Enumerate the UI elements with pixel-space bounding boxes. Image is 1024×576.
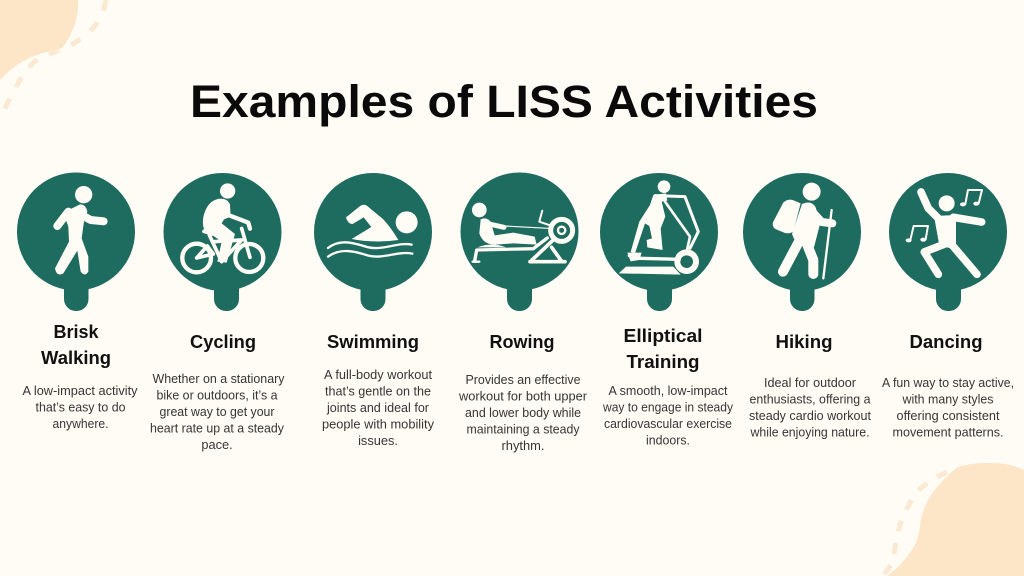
heading: rowing: Rowing	[490, 331, 554, 352]
text: dancing description: movement patterns.	[892, 424, 1004, 440]
heading: brisk walking: Brisk	[54, 321, 99, 342]
text: hiking description	[749, 375, 871, 440]
text: elliptical description	[602, 383, 734, 448]
heading: swimming: Swimming	[327, 331, 419, 352]
text: cycling description	[150, 371, 285, 452]
marker: rowing	[460, 172, 578, 311]
text: cycling description: Whether on a stationary	[152, 371, 285, 386]
text: hiking description: Ideal for outdoor	[764, 375, 857, 390]
marker: dancing	[889, 173, 1007, 311]
text: cycling description: heart rate up at a steady	[150, 420, 285, 436]
decorative blob: bottom right	[882, 463, 1024, 576]
heading: cycling: Cycling	[190, 331, 256, 352]
text: rowing description: workout for both upper	[458, 388, 588, 404]
text: elliptical description: cardiovascular exercise	[604, 416, 732, 431]
marker: swimming	[314, 173, 432, 311]
text: rowing description: rhythm.	[502, 438, 544, 453]
panel: swimming	[314, 173, 435, 448]
text: cycling description: great way to get your	[160, 404, 275, 419]
text: rowing description: Provides an effective	[466, 372, 580, 387]
panel: hiking	[743, 173, 871, 440]
text: hiking description: while enjoying nature.	[750, 424, 870, 440]
icon: elliptical machine	[619, 180, 698, 275]
text: swimming description: A full-body workout	[324, 367, 432, 382]
heading: elliptical training: Training	[626, 351, 700, 372]
text: brisk walking description: A low-impact activity	[22, 383, 138, 398]
marker: elliptical	[600, 173, 718, 311]
decorative blob: top left	[0, 0, 106, 118]
panel: elliptical training	[600, 173, 734, 448]
text: elliptical description: indoors.	[646, 432, 690, 448]
text: dancing description	[882, 375, 1014, 440]
panel: brisk walking	[17, 172, 138, 431]
text: swimming description	[322, 367, 435, 448]
text: swimming description: that’s gentle on the	[325, 384, 431, 398]
text: brisk walking description	[22, 383, 138, 431]
heading: elliptical training: Elliptical	[624, 325, 702, 346]
text: rowing description	[458, 372, 588, 453]
panel: cycling	[150, 173, 285, 452]
icon: cyclist	[182, 183, 263, 272]
icon: swimmer	[328, 205, 418, 257]
text: dancing description: with many styles	[902, 392, 994, 406]
text: cycling description: pace.	[201, 437, 233, 452]
panel: rowing	[458, 172, 588, 453]
marker: brisk walking	[17, 172, 135, 311]
text: swimming description: issues.	[358, 433, 398, 448]
text: cycling description: bike or outdoors, it’s a	[156, 388, 278, 402]
text: rowing description: and lower body while	[465, 405, 581, 420]
icon: rowing machine	[472, 203, 573, 262]
heading: brisk walking	[41, 321, 111, 368]
text: swimming description: joints and ideal for	[326, 400, 430, 415]
text: rowing description: maintaining a steady	[466, 422, 580, 436]
text: hiking description: steady cardio workout	[749, 408, 871, 423]
icon: dancer with music notes	[906, 190, 982, 274]
text: elliptical description: A smooth, low-impact	[608, 383, 728, 398]
heading: hiking: Hiking	[776, 331, 832, 352]
text: brisk walking description: anywhere.	[52, 416, 108, 431]
heading: elliptical training	[624, 325, 702, 372]
marker: hiking	[743, 173, 861, 311]
text: swimming description: people with mobility	[322, 416, 435, 432]
title: Examples of LISS Activities	[190, 76, 818, 127]
heading: dancing: Dancing	[910, 331, 982, 352]
text: elliptical description: way to engage in steady	[602, 400, 734, 414]
panel: dancing	[882, 173, 1014, 440]
marker: cycling	[164, 173, 282, 311]
text: brisk walking description: that’s easy to do	[36, 400, 126, 414]
text: dancing description: offering consistent	[896, 408, 1000, 423]
icon: walking person	[55, 186, 104, 275]
text: hiking description: enthusiasts, offering a	[750, 392, 871, 406]
icon: hiker	[773, 183, 832, 278]
text: dancing description: A fun way to stay active,	[882, 375, 1014, 390]
heading: brisk walking: Walking	[41, 347, 111, 368]
